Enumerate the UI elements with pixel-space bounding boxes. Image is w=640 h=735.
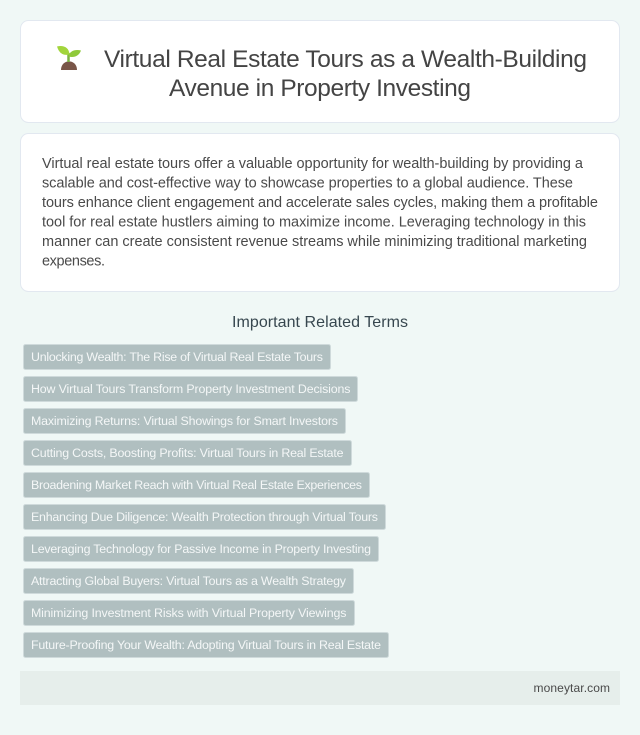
- panel: summary card: [20, 134, 620, 292]
- tag 10: [24, 632, 388, 658]
- tag 3: [24, 408, 346, 434]
- tag 5: Broadening Market Reach with Virtual Real Estate Experiences: [31, 478, 362, 492]
- list: related term tags: [24, 344, 388, 658]
- tag 1: Unlocking Wealth: The Rise of Virtual Real Estate Tours: [31, 350, 323, 364]
- tag 1: [24, 344, 330, 370]
- text block: summary: [42, 156, 598, 270]
- tag 3: Maximizing Returns: Virtual Showings for Smart Investors: [31, 414, 338, 428]
- tag 2: [24, 376, 358, 402]
- title: [104, 46, 587, 102]
- footer: [20, 671, 620, 705]
- tag 7: Leveraging Technology for Passive Income in Property Investing: [31, 542, 371, 556]
- tag 6: Enhancing Due Diligence: Wealth Protection through Virtual Tours: [31, 510, 378, 524]
- icon: sprout: [57, 46, 81, 70]
- tag 9: [24, 600, 354, 626]
- title: Virtual Real Estate Tours as a Wealth-Building: [104, 46, 587, 73]
- footer: moneytar.com: [534, 681, 610, 695]
- tag 9: Minimizing Investment Risks with Virtual Property Viewings: [31, 606, 346, 620]
- tag 2: How Virtual Tours Transform Property Investment Decisions: [31, 382, 350, 396]
- tag 4: [24, 440, 352, 466]
- text block: summary: manner can create consistent revenue streams while minimizing traditional marketing: [42, 234, 587, 250]
- heading: related terms: Important Related Terms: [232, 314, 408, 331]
- tag 8: Attracting Global Buyers: Virtual Tours as a Wealth Strategy: [31, 574, 347, 588]
- tag 7: [24, 536, 378, 562]
- text block: summary: tours enhance client engagement and accelerate sales cycles, making them a profitable: [42, 195, 598, 211]
- text block: summary: Virtual real estate tours offer a valuable opportunity for wealth-building by providing a: [42, 156, 584, 172]
- title: Avenue in Property Investing: [169, 75, 471, 102]
- text block: summary: expenses.: [42, 254, 105, 270]
- tag 4: Cutting Costs, Boosting Profits: Virtual Tours in Real Estate: [31, 446, 344, 460]
- text block: summary: scalable and cost-effective way to showcase properties to a global audience. These: [42, 176, 573, 192]
- tag 5: [24, 472, 370, 498]
- tag 8: [24, 568, 354, 594]
- tag 10: Future-Proofing Your Wealth: Adopting Virtual Tours in Real Estate: [31, 638, 381, 652]
- panel: title card: [20, 20, 620, 122]
- tag 6: [24, 504, 386, 530]
- text block: summary: tool for real estate hustlers aiming to maximize income. Leveraging technology in this: [42, 214, 586, 230]
